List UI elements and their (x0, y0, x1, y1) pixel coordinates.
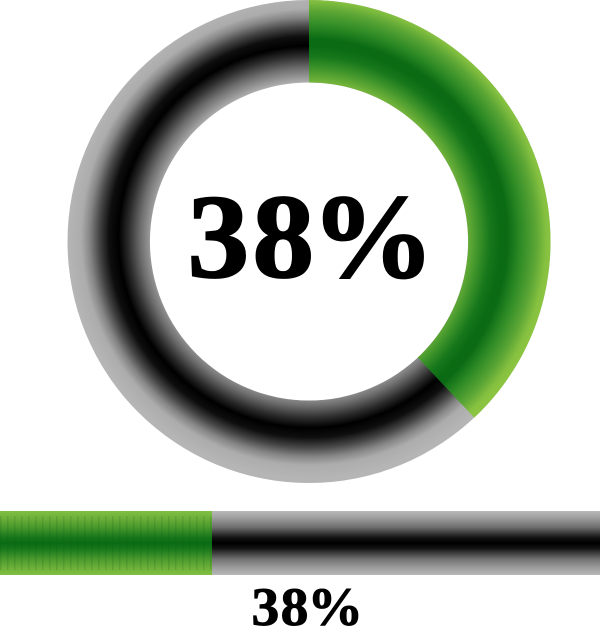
donut center value: 38% (187, 171, 435, 304)
donut segment: green 38 percent (309, 0, 551, 418)
bar fill: green 38 percent (0, 511, 212, 575)
donut track: black remainder (68, 0, 550, 483)
donut chart: 38 percent (68, 0, 551, 483)
bar track: black remainder (212, 511, 600, 575)
progress bar: 38 percent (0, 511, 600, 575)
